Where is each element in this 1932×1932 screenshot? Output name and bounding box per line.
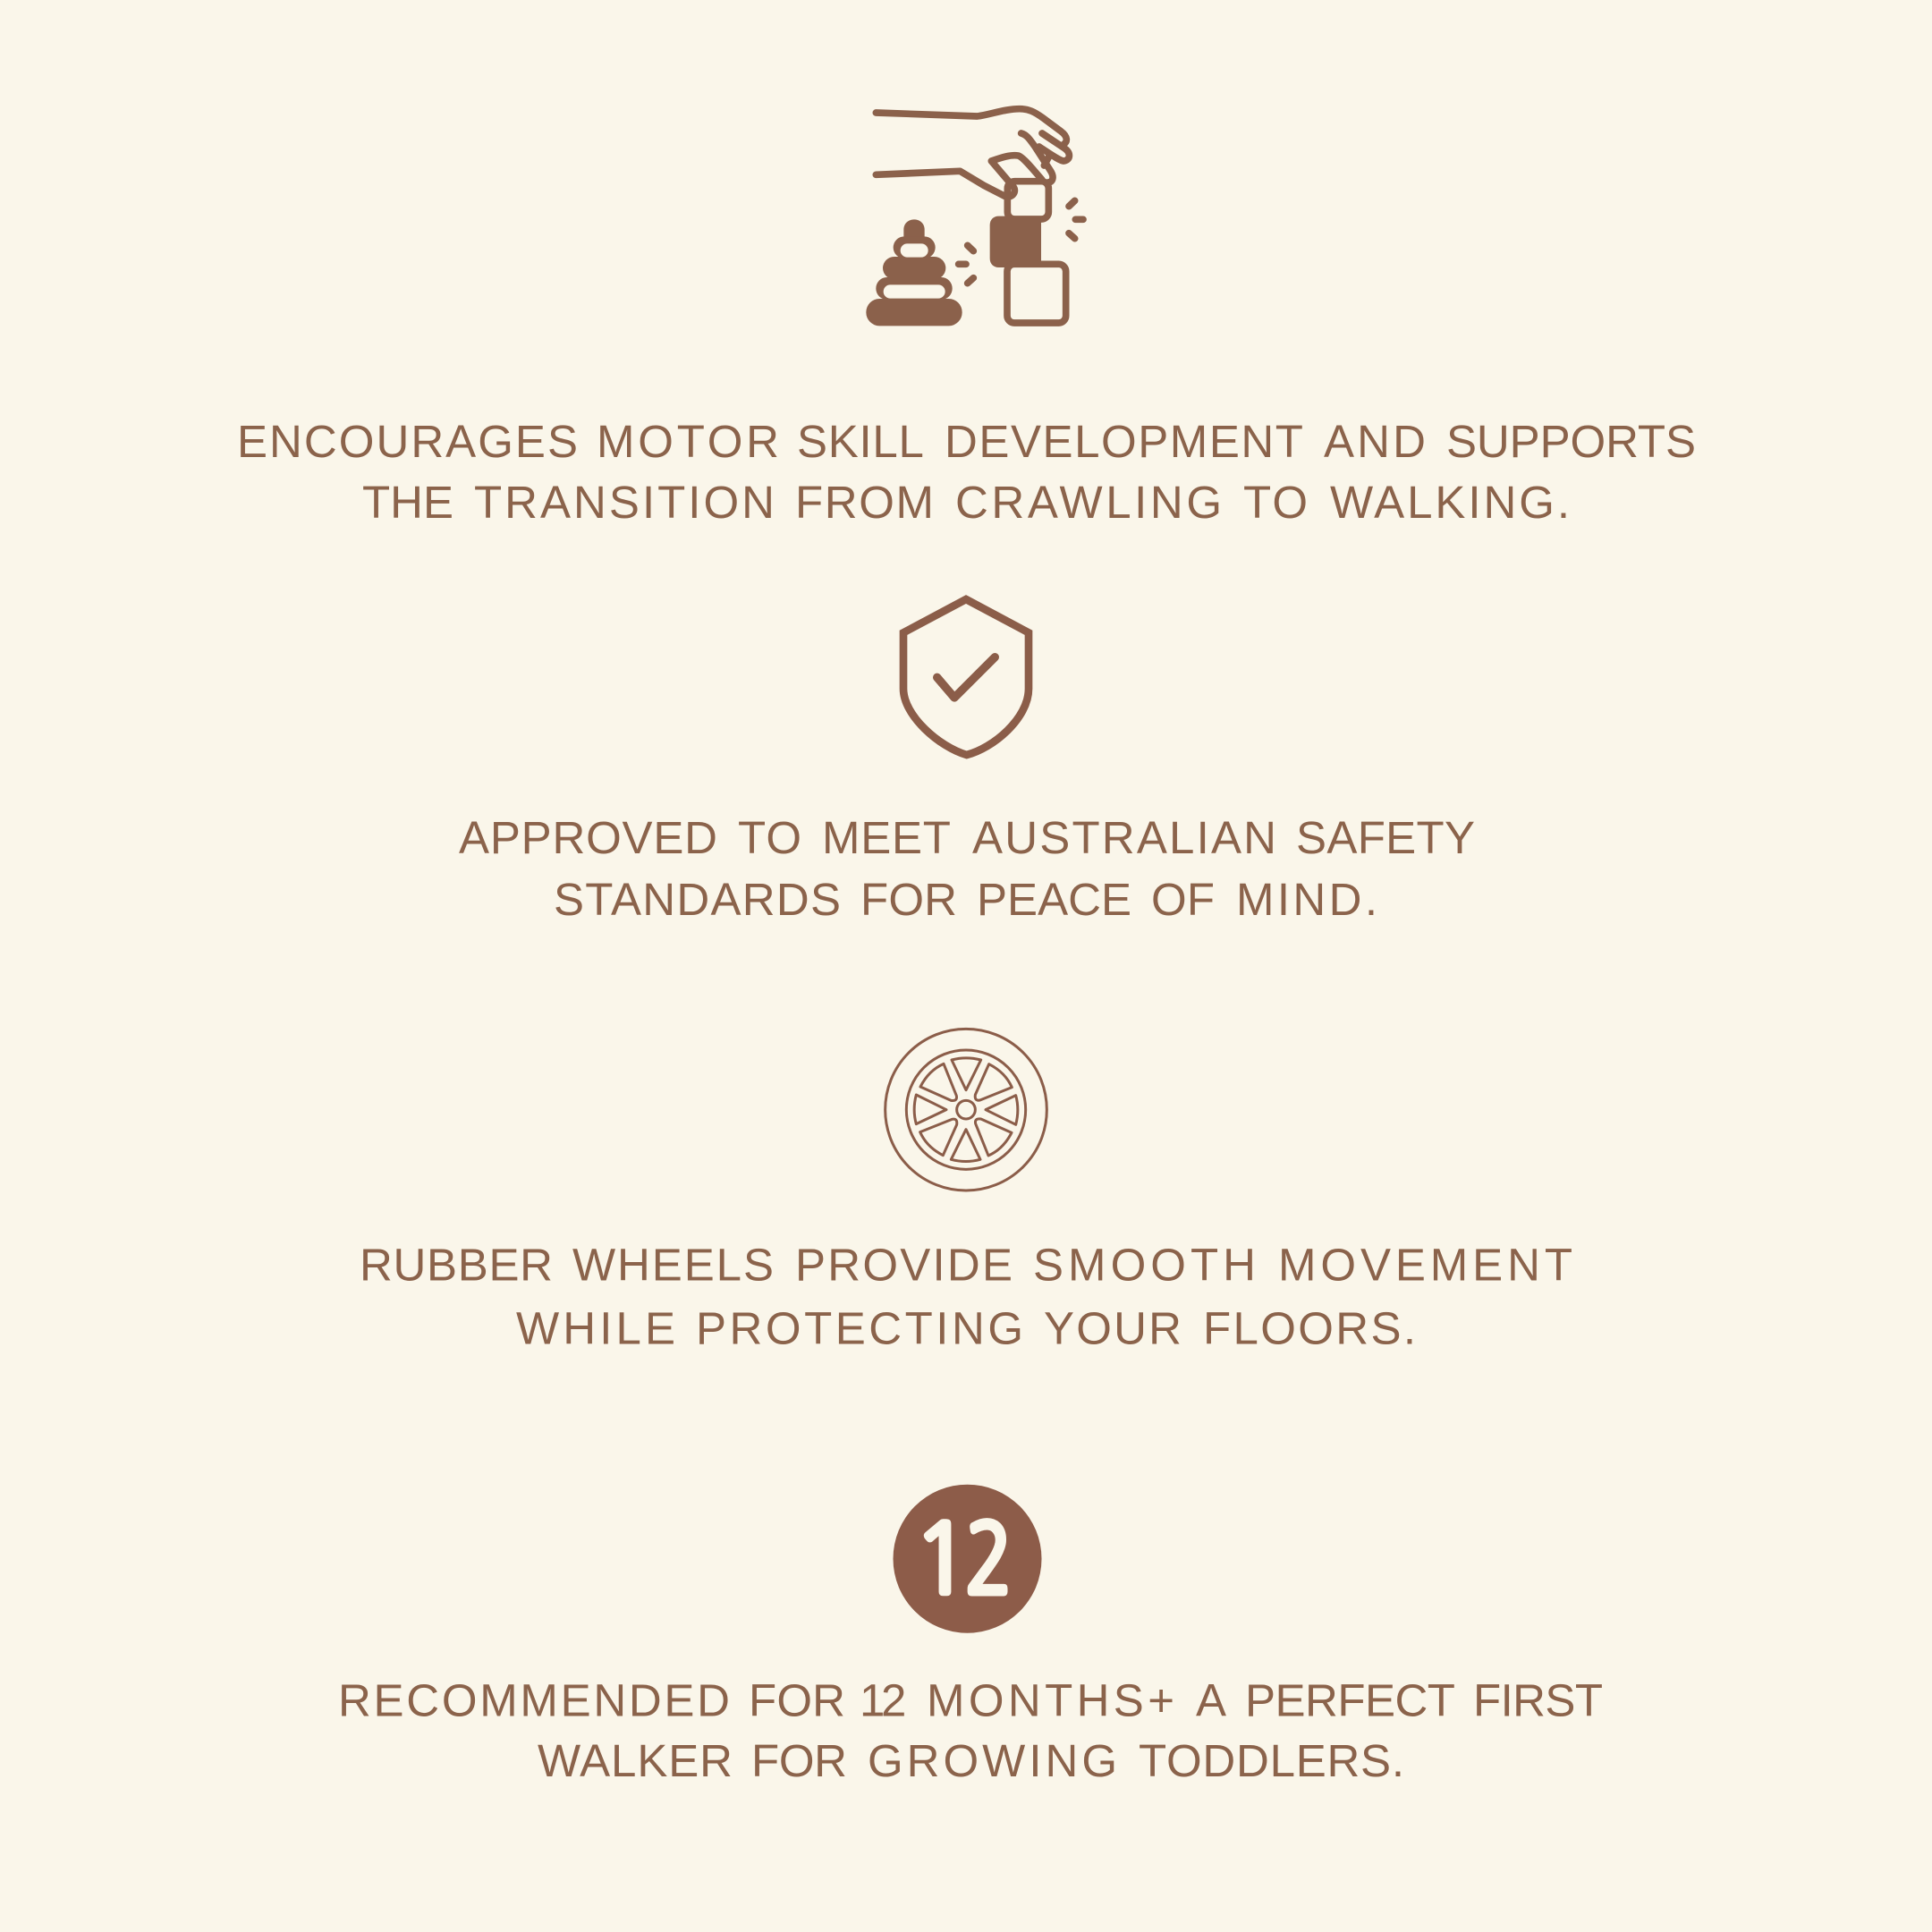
- text: safety line 1: MEET: [822, 812, 950, 863]
- text: safety line 2: FOR: [860, 874, 957, 925]
- text: age line 1: A: [1196, 1674, 1226, 1726]
- stacking ring toy: [866, 219, 962, 326]
- text: safety line 1: AUSTRALIAN: [972, 812, 1276, 863]
- lower arm and thumb: [876, 156, 1042, 197]
- badge number: [913, 1512, 1013, 1606]
- left spark lines: [959, 245, 973, 284]
- text: wheels line 2: PROTECTING: [696, 1302, 1023, 1354]
- text: motor skills line 1: SUPPORTS: [1446, 416, 1696, 467]
- text: motor skills line 2: FROM: [795, 477, 934, 528]
- text: wheels line 2: YOUR: [1044, 1302, 1182, 1354]
- text: age line 1: 12: [860, 1674, 906, 1726]
- bottom block: [1007, 264, 1066, 323]
- icon: rubber wheel: [886, 1029, 1046, 1191]
- text: age line 1: RECOMMENDED: [338, 1674, 730, 1726]
- check mark: [937, 657, 995, 698]
- badge circle: [893, 1485, 1041, 1633]
- shield outline: [903, 599, 1029, 755]
- hub: [957, 1100, 975, 1119]
- badge number: 1: [913, 1512, 970, 1606]
- text: safety line 2: OF: [1151, 874, 1215, 925]
- text: safety line 2: PEACE: [977, 874, 1131, 925]
- text: age line 2: TODDLERS.: [1139, 1735, 1404, 1786]
- text: age line 1: FOR: [749, 1674, 845, 1726]
- icon: 12 months badge: [893, 1485, 1041, 1633]
- text: age line 1: PERFECT: [1245, 1674, 1454, 1726]
- panel: motor skills: [237, 109, 1696, 528]
- text: motor skills line 2: THE: [362, 477, 453, 528]
- tyre outer ring: [886, 1029, 1046, 1191]
- middle filled block: [990, 216, 1041, 267]
- text: motor skills line 1: DEVELOPMENT: [945, 416, 1302, 467]
- text: safety line 1: TO: [738, 812, 801, 863]
- text: wheels line 1: RUBBER: [360, 1240, 553, 1290]
- text: safety line 2: MIND.: [1236, 874, 1377, 925]
- text: safety line 2: STANDARDS: [554, 874, 841, 925]
- text: age line 2: WALKER: [538, 1735, 733, 1786]
- text: motor skills line 1: MOTOR: [597, 416, 779, 467]
- text: wheels line 1: SMOOTH: [1033, 1240, 1256, 1290]
- text: motor skills line 2: TO: [1243, 477, 1308, 528]
- upper arm and fingers: [876, 109, 1069, 182]
- spoke gaps: [914, 1058, 1018, 1161]
- text: wheels line 1: MOVEMENT: [1278, 1240, 1572, 1290]
- panel: safety: [459, 599, 1475, 925]
- text: motor skills line 2: CRAWLING: [955, 477, 1222, 528]
- text: motor skills line 1: SKILL: [797, 416, 923, 467]
- badge number: 2: [965, 1512, 1013, 1606]
- text: motor skills line 2: WALKING.: [1330, 477, 1570, 528]
- text: wheels line 2: FLOORS.: [1203, 1302, 1416, 1354]
- panel: age recommendation: [338, 1485, 1603, 1786]
- top block: [1007, 182, 1048, 219]
- text: motor skills line 2: TRANSITION: [474, 477, 775, 528]
- text: age line 2: GROWING: [868, 1735, 1117, 1786]
- text: safety line 1: APPROVED: [459, 812, 717, 863]
- rim ring: [906, 1050, 1026, 1169]
- text: age line 1: FIRST: [1473, 1674, 1603, 1726]
- panel: wheels: [360, 1029, 1572, 1354]
- text: motor skills line 1: AND: [1324, 416, 1426, 467]
- text: age line 2: FOR: [751, 1735, 847, 1786]
- icon: hands stacking blocks and ring toy: [866, 109, 1083, 326]
- text: wheels line 1: WHEELS: [572, 1240, 774, 1290]
- text: motor skills line 1: ENCOURAGES: [237, 416, 578, 467]
- text: wheels line 2: WHILE: [516, 1302, 675, 1354]
- text: safety line 1: SAFETY: [1296, 812, 1475, 863]
- text: wheels line 1: PROVIDE: [795, 1240, 1013, 1290]
- right spark lines: [1069, 200, 1083, 239]
- icon: shield with check: [903, 599, 1029, 755]
- text: age line 1: MONTHS+: [927, 1674, 1174, 1726]
